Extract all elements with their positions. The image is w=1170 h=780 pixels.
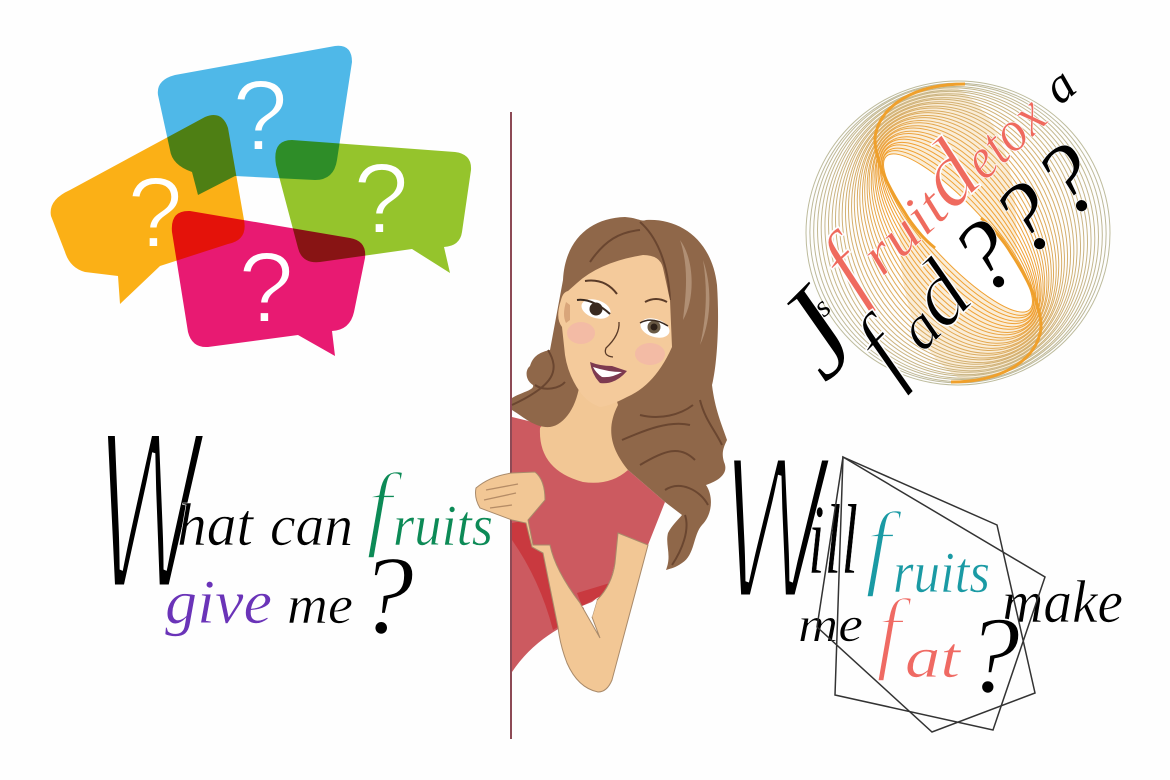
word can: can bbox=[270, 493, 353, 558]
blush left bbox=[567, 322, 595, 344]
eye left bbox=[577, 296, 613, 322]
divider line bbox=[510, 112, 512, 739]
speech bubbles cluster bbox=[51, 46, 471, 356]
bubble: blue bbox=[158, 46, 352, 195]
blush right bbox=[635, 343, 665, 365]
hair shading bbox=[512, 222, 722, 565]
word hat: hat bbox=[177, 492, 254, 558]
white lens bbox=[866, 137, 1050, 329]
shirt bbox=[512, 417, 665, 672]
nose bbox=[605, 322, 619, 357]
heading: Will fruits make me fat bbox=[723, 413, 1123, 716]
letter W: W bbox=[97, 383, 206, 636]
neck and chest bbox=[540, 385, 650, 483]
woman illustration bbox=[476, 217, 727, 692]
word fruit detox: f bbox=[798, 213, 898, 317]
word fad: d bbox=[886, 241, 991, 346]
eye right bbox=[638, 315, 672, 341]
eyebrows bbox=[585, 281, 667, 302]
word a: a bbox=[1031, 55, 1086, 114]
hair highlights bbox=[680, 240, 709, 345]
orange S curve upper bbox=[875, 84, 965, 248]
question marks: ? bbox=[930, 197, 1038, 315]
lower shaded lobe bbox=[900, 210, 1037, 382]
bubble: pink bbox=[172, 211, 365, 356]
word give: give bbox=[165, 569, 272, 637]
question mark: blue: ? bbox=[232, 60, 288, 172]
question mark: pink: ? bbox=[238, 232, 294, 344]
teeth bbox=[593, 367, 622, 377]
letter s: s bbox=[806, 291, 837, 323]
letter W: W bbox=[723, 413, 832, 642]
word fruits: ruits bbox=[393, 493, 493, 558]
arm and hand bbox=[476, 472, 648, 692]
word make: make bbox=[1002, 569, 1123, 635]
bubble: orange bbox=[51, 115, 245, 304]
question mark: green: ? bbox=[353, 143, 409, 255]
word fad: f bbox=[832, 295, 935, 398]
word fruits: f bbox=[865, 492, 903, 598]
word me: me bbox=[287, 575, 353, 635]
heading: Is fruit detox a fad bbox=[744, 55, 1121, 406]
upper shaded lobe bbox=[879, 84, 1016, 256]
word fat bbox=[876, 580, 962, 690]
word fad bbox=[832, 238, 992, 398]
word fruit detox: ruit bbox=[846, 173, 962, 287]
word fad: a bbox=[885, 293, 955, 363]
word fat: at bbox=[905, 625, 962, 690]
hair bbox=[512, 217, 727, 570]
word fruit detox: etox bbox=[949, 82, 1059, 192]
white gap under arm bbox=[582, 600, 597, 617]
orange S curve lower bbox=[951, 218, 1041, 382]
question marks: ? bbox=[971, 159, 1079, 277]
question mark: ? bbox=[358, 534, 414, 658]
word me: me bbox=[798, 596, 863, 652]
question mark: ? bbox=[965, 594, 1020, 716]
ear shading bbox=[564, 302, 570, 323]
pentagon frames bbox=[817, 457, 1045, 732]
word fruit detox bbox=[798, 58, 1065, 317]
face bbox=[558, 255, 672, 407]
word fat: f bbox=[876, 580, 913, 682]
word fruit detox: d bbox=[895, 121, 999, 227]
rings graphic bbox=[780, 54, 1136, 412]
fingers lines bbox=[484, 484, 518, 508]
question marks: ? bbox=[1013, 121, 1121, 239]
shirt shadow bbox=[512, 520, 610, 630]
heading: What can fruits give me bbox=[97, 383, 493, 658]
question mark: orange: ? bbox=[127, 157, 183, 269]
letter J: J bbox=[744, 259, 890, 406]
bubble: green bbox=[275, 140, 471, 273]
word ill: ill bbox=[808, 484, 858, 595]
word fruits bbox=[865, 492, 990, 605]
word fruits: ruits bbox=[893, 540, 990, 605]
word fruits: f bbox=[366, 453, 404, 559]
question marks bbox=[930, 121, 1121, 315]
word fruits bbox=[366, 453, 493, 559]
mouth bbox=[590, 362, 627, 383]
